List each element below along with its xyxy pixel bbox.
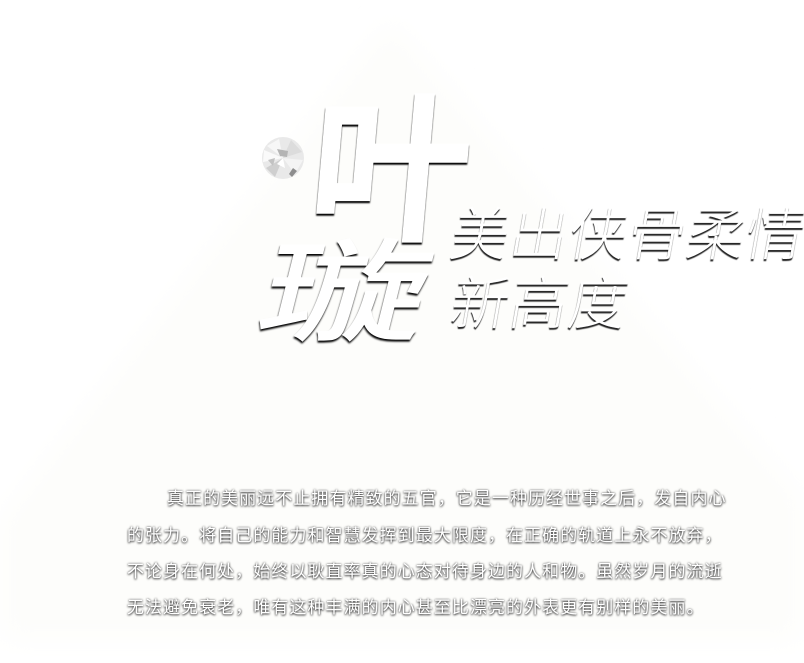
- body paragraph: 无法避免衰老，唯有这种丰满的内心甚至比漂亮的外表更有别样的美丽。: [127, 598, 705, 617]
- body paragraph: 不论身在何处，始终以耿直率真的心态对待身边的人和物。虽然岁月的流逝: [127, 562, 723, 581]
- big name character: 璇: 璇: [247, 231, 446, 356]
- icon: diamond: [262, 137, 304, 179]
- subtitle line 1: 美出侠骨柔情: [445, 203, 804, 268]
- body paragraph: [126, 488, 727, 618]
- body paragraph: 真正的美丽远不止拥有精致的五官，它是一种历经世事之后，发自内心: [167, 489, 727, 508]
- body paragraph: 的张力。将自己的能力和智慧发挥到最大限度，在正确的轨道上永不放弃，: [127, 526, 723, 545]
- subtitle line 2: 新高度: [445, 272, 634, 337]
- big name character: 叶: 叶: [301, 82, 479, 263]
